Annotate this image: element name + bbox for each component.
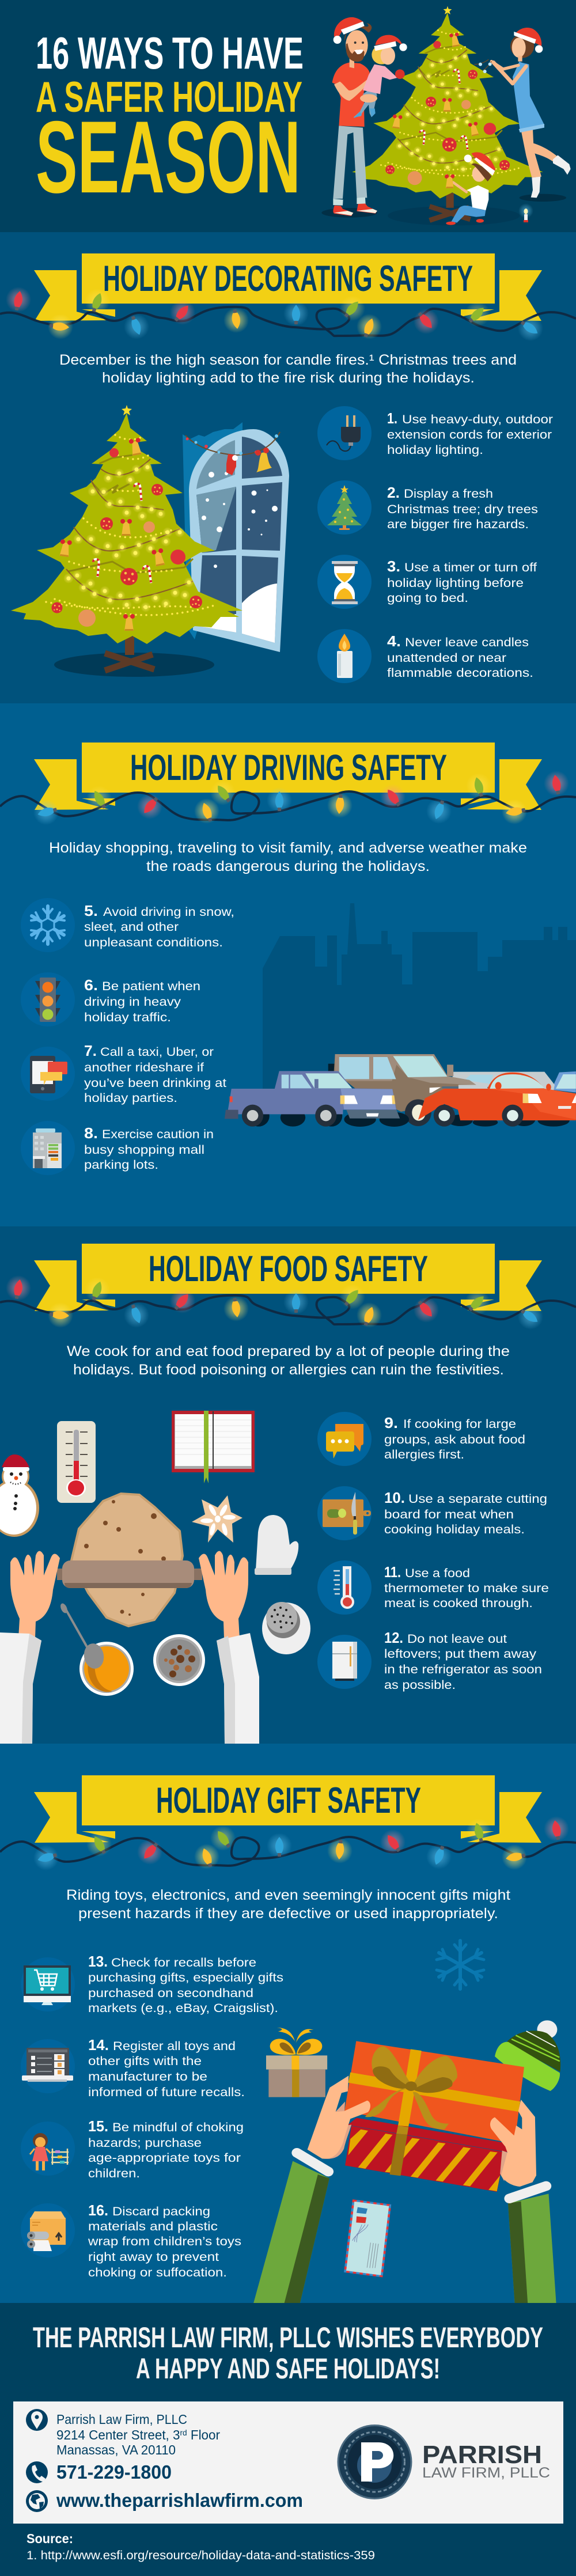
dough bbox=[71, 1494, 183, 1626]
tip 15: hazards; purchase bbox=[88, 2136, 202, 2150]
tip 16: 16. bbox=[88, 2202, 108, 2219]
intro text: decorating: December is the high season for candle fires.¹ Christmas trees and bbox=[59, 352, 517, 368]
tip 2: 2. bbox=[387, 484, 400, 501]
banner: holiday gift safety bbox=[34, 1775, 542, 1843]
illustration: envelope bbox=[345, 2200, 390, 2276]
tip 2 bbox=[317, 480, 538, 535]
tip 5: sleet, and other bbox=[84, 920, 179, 934]
tip 11: meat is cooked through. bbox=[384, 1597, 533, 1610]
icon: laptop product registration bbox=[21, 2039, 75, 2093]
title bbox=[36, 28, 304, 214]
address: Manassas, VA 20110 bbox=[56, 2442, 176, 2457]
illustration: hands holding gift bbox=[253, 2041, 556, 2303]
tip 1: 1. bbox=[387, 410, 397, 427]
tip 7: you’ve been drinking at bbox=[84, 1077, 226, 1090]
icon: phone and chat bbox=[21, 1047, 75, 1101]
illustration: snowflake bbox=[437, 1941, 484, 1989]
string lights bbox=[0, 285, 576, 346]
illustration: window bbox=[183, 422, 289, 652]
tip 11 bbox=[317, 1560, 549, 1615]
snowman cookie bbox=[0, 1454, 39, 1537]
tip 12: leftovers; put them away bbox=[384, 1647, 537, 1661]
icon: computer with cart bbox=[21, 1957, 75, 2011]
icon: candle bbox=[317, 629, 372, 683]
logo: seal bbox=[338, 2425, 412, 2499]
tip 3 bbox=[317, 555, 537, 609]
tip 16: right away to prevent bbox=[88, 2251, 219, 2264]
tip 15: age-appropriate toys for bbox=[88, 2151, 241, 2165]
tip 9: groups, ask about food bbox=[384, 1433, 525, 1446]
tip 13: purchased on secondhand bbox=[88, 1987, 253, 2000]
tip 7 bbox=[21, 1042, 226, 1105]
sources: 1. http://www.esfi.org/resource/holiday-data-and-statistics-359 bbox=[26, 2549, 375, 2562]
closing message bbox=[33, 2321, 543, 2385]
tip 14: other gifts with the bbox=[88, 2055, 202, 2068]
boy bbox=[445, 152, 495, 225]
illustration: traffic of cars bbox=[225, 1054, 576, 1127]
sources: Source: bbox=[26, 2531, 73, 2546]
right cuff bbox=[509, 2186, 546, 2199]
tip 10: board for meat when bbox=[384, 1508, 514, 1521]
tip 8: parking lots. bbox=[84, 1158, 158, 1172]
tip 8: Exercise caution in bbox=[102, 1128, 214, 1141]
tip 9 bbox=[317, 1412, 525, 1466]
illustration: family decorating tree bbox=[321, 6, 571, 225]
title: 16 WAYS TO HAVE bbox=[36, 28, 304, 78]
sources bbox=[26, 2531, 375, 2562]
tip 1 bbox=[317, 406, 553, 460]
tip 4 bbox=[317, 629, 533, 683]
icon: box and paper rolls bbox=[21, 2203, 75, 2257]
illustration: winter hat bbox=[495, 2020, 560, 2091]
tip 10 bbox=[317, 1486, 547, 1540]
banner: holiday decorating safety bbox=[34, 253, 542, 321]
orange bowl with spoon bbox=[59, 1603, 134, 1696]
salt shaker bbox=[262, 1602, 310, 1654]
logo: wordmark: LAW FIRM, PLLC bbox=[422, 2465, 550, 2481]
tip 16: choking or suffocation. bbox=[88, 2266, 227, 2279]
tip 16 bbox=[21, 2202, 241, 2279]
tip 10: cooking holiday meals. bbox=[384, 1523, 525, 1536]
tip 7: 7. bbox=[84, 1042, 97, 1059]
tip 12: Do not leave out bbox=[407, 1632, 507, 1646]
intro text: driving: Holiday shopping, traveling to visit family, and adverse weather make bbox=[49, 840, 527, 856]
tip 3: 3. bbox=[387, 558, 400, 575]
tip 9: 9. bbox=[384, 1414, 398, 1431]
string lights bbox=[0, 1274, 576, 1335]
tip 5: unpleasant conditions. bbox=[84, 936, 223, 949]
tip 2: Christmas tree; dry trees bbox=[387, 503, 538, 516]
tip 15 bbox=[21, 2117, 244, 2180]
tip 8 bbox=[21, 1121, 214, 1175]
panel: decorating background bbox=[0, 232, 576, 703]
title: A SAFER HOLIDAY bbox=[36, 73, 302, 121]
tip 6 bbox=[21, 972, 200, 1026]
left hand bbox=[308, 2075, 370, 2159]
banner: holiday gift safety: HOLIDAY GIFT SAFETY bbox=[156, 1781, 421, 1821]
panel: header background bbox=[0, 0, 576, 232]
panel: gift background bbox=[0, 1744, 576, 2303]
string lights bbox=[0, 769, 576, 828]
address: 9214 Center Street, 3 bbox=[56, 2427, 183, 2442]
tip 4: unattended or near bbox=[387, 651, 506, 665]
tip 12: 12. bbox=[384, 1629, 403, 1646]
logo: wordmark bbox=[422, 2441, 550, 2481]
phone number: 571-229-1800 bbox=[56, 2461, 172, 2483]
child on father's arm bbox=[353, 35, 407, 118]
red car bbox=[418, 1073, 576, 1127]
icon: small tree bbox=[317, 480, 372, 535]
father bbox=[321, 17, 377, 218]
tip 3: going to bed. bbox=[387, 592, 468, 605]
illustration: small gift bbox=[266, 2028, 327, 2097]
icon: hourglass bbox=[317, 555, 372, 609]
tip 5: Avoid driving in snow, bbox=[103, 906, 234, 919]
left sleeve bbox=[0, 1632, 41, 1744]
tip 5 bbox=[21, 898, 234, 952]
intro text: gift: Riding toys, electronics, and even seemingly innocent gifts might bbox=[66, 1887, 510, 1903]
tree bbox=[352, 6, 543, 225]
icon: chat bubbles bbox=[317, 1412, 372, 1466]
tip 10: Use a separate cutting bbox=[408, 1492, 547, 1506]
illustration: holiday baking bbox=[0, 1411, 310, 1744]
intro text: food: We cook for and eat food prepared by a lot of people during the bbox=[67, 1343, 510, 1359]
tip 4: flammable decorations. bbox=[387, 666, 533, 680]
intro text: gift bbox=[66, 1887, 510, 1922]
tip 8: busy shopping mall bbox=[84, 1143, 204, 1157]
tip 10: 10. bbox=[384, 1489, 405, 1506]
tip 13: markets (e.g., eBay, Craigslist). bbox=[88, 2002, 278, 2015]
tip 16: wrap from children’s toys bbox=[88, 2235, 241, 2248]
tip 15: Be mindful of choking bbox=[112, 2121, 244, 2134]
tip 12: in the refrigerator as soon bbox=[384, 1663, 542, 1676]
icon: traffic light bbox=[21, 972, 75, 1026]
tip 14: manufacturer to be bbox=[88, 2070, 207, 2083]
left hand bbox=[10, 1551, 60, 1638]
intro text: driving: the roads dangerous during the holidays. bbox=[146, 858, 430, 874]
website: www.theparrishlawfirm.com bbox=[56, 2490, 303, 2511]
icon: refrigerator bbox=[317, 1635, 372, 1689]
tip 5: 5. bbox=[84, 902, 98, 919]
rolling pin bbox=[57, 1560, 202, 1588]
right sleeve bbox=[217, 1633, 259, 1744]
tip 3: Use a timer or turn off bbox=[404, 561, 537, 574]
bowl of nuts bbox=[153, 1634, 205, 1686]
tip 8: 8. bbox=[84, 1124, 98, 1142]
cookbook bbox=[172, 1411, 255, 1483]
tip 7: Call a taxi, Uber, or bbox=[100, 1045, 214, 1059]
tip 2: Display a fresh bbox=[404, 487, 493, 501]
icon: shopping mall bbox=[21, 1121, 75, 1175]
tip 14: informed of future recalls. bbox=[88, 2086, 245, 2099]
star cookie bbox=[192, 1495, 242, 1543]
tip 6: 6. bbox=[84, 976, 98, 994]
icon: girl doll and abacus bbox=[21, 2122, 75, 2176]
intro text: food bbox=[67, 1343, 510, 1378]
tip 15: 15. bbox=[88, 2117, 108, 2135]
tip 13: purchasing gifts, especially gifts bbox=[88, 1971, 283, 1984]
banner: holiday food safety bbox=[34, 1244, 542, 1311]
tip 3: holiday lighting before bbox=[387, 577, 524, 590]
illustration: city skyline bbox=[263, 903, 576, 1109]
tip 7: another rideshare if bbox=[84, 1061, 204, 1074]
tip 15: children. bbox=[88, 2167, 140, 2180]
tip 14: Register all toys and bbox=[113, 2040, 236, 2053]
panel: footer background bbox=[0, 2303, 576, 2576]
icon: snowflake bbox=[21, 898, 75, 952]
tip 4: 4. bbox=[387, 632, 401, 650]
contact card bbox=[13, 2401, 563, 2524]
thermometer card bbox=[57, 1421, 96, 1503]
banner: holiday food safety: HOLIDAY FOOD SAFETY bbox=[149, 1249, 428, 1289]
title: SEASON bbox=[36, 100, 301, 214]
intro text: gift: present hazards if they are defective or used inappropriately. bbox=[78, 1906, 498, 1922]
oven mitt bbox=[255, 1515, 298, 1575]
intro text: decorating: holiday lighting add to the fire risk during the holidays. bbox=[102, 370, 475, 386]
right hand bbox=[199, 1551, 248, 1638]
icon: plug bbox=[317, 406, 372, 460]
tip 6: driving in heavy bbox=[84, 995, 181, 1009]
tip 12 bbox=[317, 1629, 542, 1692]
right sleeve bbox=[508, 2194, 556, 2303]
tip 1: holiday lighting. bbox=[387, 444, 483, 457]
tip 11: Use a food bbox=[405, 1567, 470, 1580]
right hand bbox=[490, 2100, 536, 2187]
icon: globe bbox=[26, 2490, 48, 2512]
tip 7: holiday parties. bbox=[84, 1092, 177, 1105]
left cuff bbox=[297, 2153, 328, 2172]
tip 2: are bigger fire hazards. bbox=[387, 518, 529, 531]
tip 16: materials and plastic bbox=[88, 2220, 218, 2233]
tip 6: holiday traffic. bbox=[84, 1011, 171, 1024]
tip 13: 13. bbox=[88, 1953, 108, 1970]
address bbox=[56, 2412, 220, 2457]
panel: driving background bbox=[0, 703, 576, 1226]
tip 14 bbox=[21, 2036, 245, 2099]
tip 9: allergies first. bbox=[384, 1448, 464, 1461]
tip 4: Never leave candles bbox=[405, 636, 529, 649]
string lights bbox=[0, 1814, 576, 1873]
icon: location pin bbox=[26, 2409, 48, 2431]
mother bbox=[474, 28, 571, 202]
panel: food background bbox=[0, 1226, 576, 1744]
logo: wordmark: PARRISH bbox=[422, 2441, 542, 2469]
tip 13 bbox=[21, 1953, 283, 2015]
illustration: decorated tree bbox=[11, 405, 242, 677]
icon: phone bbox=[26, 2461, 48, 2483]
tip 13: Check for recalls before bbox=[111, 1956, 256, 1969]
address: Floor bbox=[187, 2427, 220, 2442]
tip 1: extension cords for exterior bbox=[387, 429, 552, 441]
pickup truck bbox=[225, 1071, 409, 1127]
tip 11: 11. bbox=[384, 1563, 401, 1581]
tip 14: 14. bbox=[88, 2036, 109, 2054]
icon: cutting board bbox=[317, 1486, 372, 1540]
address: rd bbox=[180, 2428, 187, 2437]
tip 16: Discard packing bbox=[112, 2205, 210, 2218]
silver car bbox=[451, 1072, 555, 1090]
blue car at right bbox=[551, 1071, 576, 1093]
intro text: food: holidays. But food poisoning or allergies can ruin the festivities. bbox=[73, 1362, 504, 1378]
intro text: driving bbox=[49, 840, 527, 874]
tip 6: Be patient when bbox=[102, 980, 200, 993]
icon: food thermometer bbox=[317, 1560, 372, 1615]
closing message: A HAPPY AND SAFE HOLIDAYS! bbox=[136, 2353, 440, 2385]
address: Parrish Law Firm, PLLC bbox=[56, 2412, 187, 2427]
tip 9: If cooking for large bbox=[403, 1418, 516, 1431]
candle bbox=[518, 203, 533, 222]
banner: holiday driving safety bbox=[34, 743, 542, 810]
left sleeve bbox=[253, 2161, 329, 2303]
intro text: decorating bbox=[59, 352, 517, 386]
tip 1: Use heavy-duty, outdoor bbox=[402, 413, 553, 426]
gift box lid bbox=[344, 2041, 524, 2152]
tip 12: as possible. bbox=[384, 1679, 456, 1692]
tip 11: thermometer to make sure bbox=[384, 1582, 549, 1595]
gift box base bbox=[345, 2126, 505, 2192]
brown truck bbox=[328, 1054, 476, 1126]
